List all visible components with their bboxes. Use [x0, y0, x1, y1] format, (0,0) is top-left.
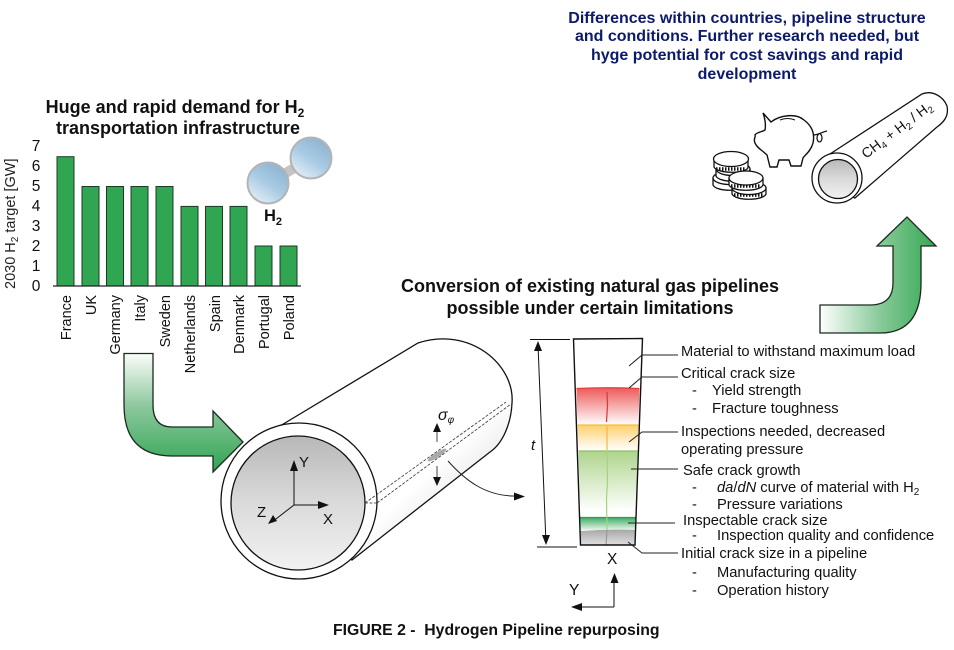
heading: differences within countries	[568, 10, 926, 83]
y axis tick labels: 2	[32, 238, 40, 255]
y axis tick labels	[32, 138, 41, 295]
heading: differences within countries: Differences within countries, pipeline structure	[568, 10, 926, 27]
axes XYZ on bore	[268, 460, 329, 524]
arrow: demand to pipeline	[124, 354, 243, 472]
bar chart: 2030 H2 target by country	[3, 138, 301, 373]
leader lines	[628, 355, 678, 553]
annotation labels: Critical crack size	[681, 366, 795, 382]
thickness dimension t	[530, 340, 577, 547]
axes X Y	[569, 551, 618, 611]
small pipe: CH4 + H2 / H2: / H	[904, 101, 931, 127]
annotation labels: da/dN curve of material with H	[717, 480, 914, 496]
crack strip on pipe wall	[365, 402, 511, 503]
pipe front ring	[221, 423, 377, 579]
annotation labels: -	[692, 583, 697, 599]
bars	[57, 157, 297, 286]
country labels: Denmark	[232, 294, 248, 354]
small pipe: CH4 + H2 / H2	[812, 93, 947, 203]
annotation labels: Inspections needed, decreased	[681, 424, 885, 440]
heading: differences within countries: hyge potential for cost savings and rapid	[591, 47, 903, 64]
icon: piggy bank	[754, 113, 814, 167]
y axis tick labels: 5	[32, 178, 40, 195]
country labels: UK	[84, 295, 100, 315]
annotation labels: -	[692, 383, 697, 399]
country labels: Portugal	[257, 295, 273, 349]
small pipe: CH4 + H2 / H2: 2	[904, 121, 915, 133]
country labels: Germany	[108, 294, 124, 355]
arrow: up to blended pipe	[820, 217, 936, 333]
annotation labels: Inspectable crack size	[683, 513, 828, 529]
red zone	[576, 388, 640, 425]
stress label and arrows: φ	[448, 415, 455, 426]
icon: pig tail	[813, 131, 827, 142]
annotation labels: -	[692, 565, 697, 581]
small pipe: CH4 + H2 / H2: + H	[879, 118, 909, 146]
y axis tick labels: 4	[32, 198, 41, 215]
annotation labels: 2	[914, 487, 920, 498]
heading: conversion of existing pipelines	[401, 276, 779, 318]
figure caption: FIGURE 2 - Hydrogen Pipeline repurposing	[333, 622, 660, 639]
heading: demand for H2: Huge and rapid demand for H	[46, 97, 298, 117]
y axis tick labels: 6	[32, 158, 40, 175]
thickness dimension t: t	[531, 437, 536, 454]
y axis title: 2030 H	[3, 242, 19, 289]
pipe wall cross-section	[530, 338, 678, 611]
small pipe: CH4 + H2 / H2: 4	[879, 140, 890, 152]
axes X Y: Y	[569, 582, 579, 599]
country labels: Poland	[282, 295, 298, 340]
green zone	[578, 451, 638, 517]
icon: piggy slot	[780, 118, 795, 120]
dark green zone	[580, 518, 636, 530]
crack	[606, 392, 608, 545]
annotation labels: -	[692, 497, 697, 513]
pipeline cylinder: Z	[257, 504, 266, 521]
icon: coins	[713, 152, 766, 199]
country labels: Sweden	[158, 295, 174, 347]
y axis tick labels: 3	[32, 218, 40, 235]
y axis title: target [GW]	[3, 158, 19, 237]
heading: differences within countries: development	[698, 66, 797, 83]
annotation labels: Material to withstand maximum load	[681, 344, 915, 360]
wall outline	[574, 338, 642, 545]
stress label and arrows	[433, 407, 455, 486]
country labels: France	[59, 295, 75, 340]
annotation labels: Manufacturing quality	[717, 565, 857, 581]
y axis tick labels: 1	[32, 258, 40, 275]
pipeline cylinder	[221, 339, 525, 579]
icon: H2 molecule	[248, 138, 332, 228]
pipeline cylinder: X	[323, 511, 333, 528]
gray zone	[580, 530, 635, 545]
small pipe: CH4 + H2 / H2: CH	[858, 136, 884, 161]
curved arrow to section	[448, 461, 515, 496]
country labels	[59, 294, 298, 373]
heading: differences within countries: and conditions. Further research needed, but	[575, 28, 920, 45]
icon: H2 molecule: 2	[276, 216, 282, 228]
annotation labels: -	[692, 528, 697, 544]
annotation labels: Inspection quality and confidence	[717, 528, 934, 544]
y axis tick labels: 7	[32, 138, 40, 155]
annotation labels: operating pressure	[681, 442, 803, 458]
stress label and arrows: σ	[438, 407, 448, 424]
pipeline cylinder: Y	[299, 454, 309, 471]
axes X Y: X	[607, 551, 618, 568]
annotation labels: -	[692, 480, 697, 496]
annotation labels: Initial crack size in a pipeline	[681, 546, 867, 562]
annotation labels: Operation history	[717, 583, 829, 599]
annotation labels: Pressure variations	[717, 497, 843, 513]
y axis title: 2	[10, 236, 21, 242]
heading: conversion of existing pipelines: Conversion of existing natural gas pipelines	[401, 276, 779, 296]
heading: demand for H2: transportation infrastructure	[56, 118, 300, 138]
pipe inner bore	[231, 436, 365, 570]
annotation labels	[681, 344, 934, 599]
icon: H2 molecule: H	[264, 207, 276, 225]
annotation labels: Yield strength	[712, 383, 801, 399]
yellow zone	[578, 425, 638, 450]
country labels: Spain	[208, 295, 224, 332]
annotation labels: -	[692, 401, 697, 417]
annotation labels: Safe crack growth	[683, 463, 801, 479]
band top lines	[576, 388, 640, 518]
y axis tick labels: 0	[32, 278, 41, 295]
heading: conversion of existing pipelines: possible under certain limitations	[446, 298, 734, 318]
heading: demand for H2	[46, 97, 305, 138]
country labels: Italy	[133, 294, 149, 322]
small pipe: CH4 + H2 / H2: 2	[926, 104, 937, 116]
annotation labels: Fracture toughness	[712, 401, 839, 417]
country labels: Netherlands	[183, 295, 199, 373]
heading: demand for H2: 2	[298, 106, 305, 120]
